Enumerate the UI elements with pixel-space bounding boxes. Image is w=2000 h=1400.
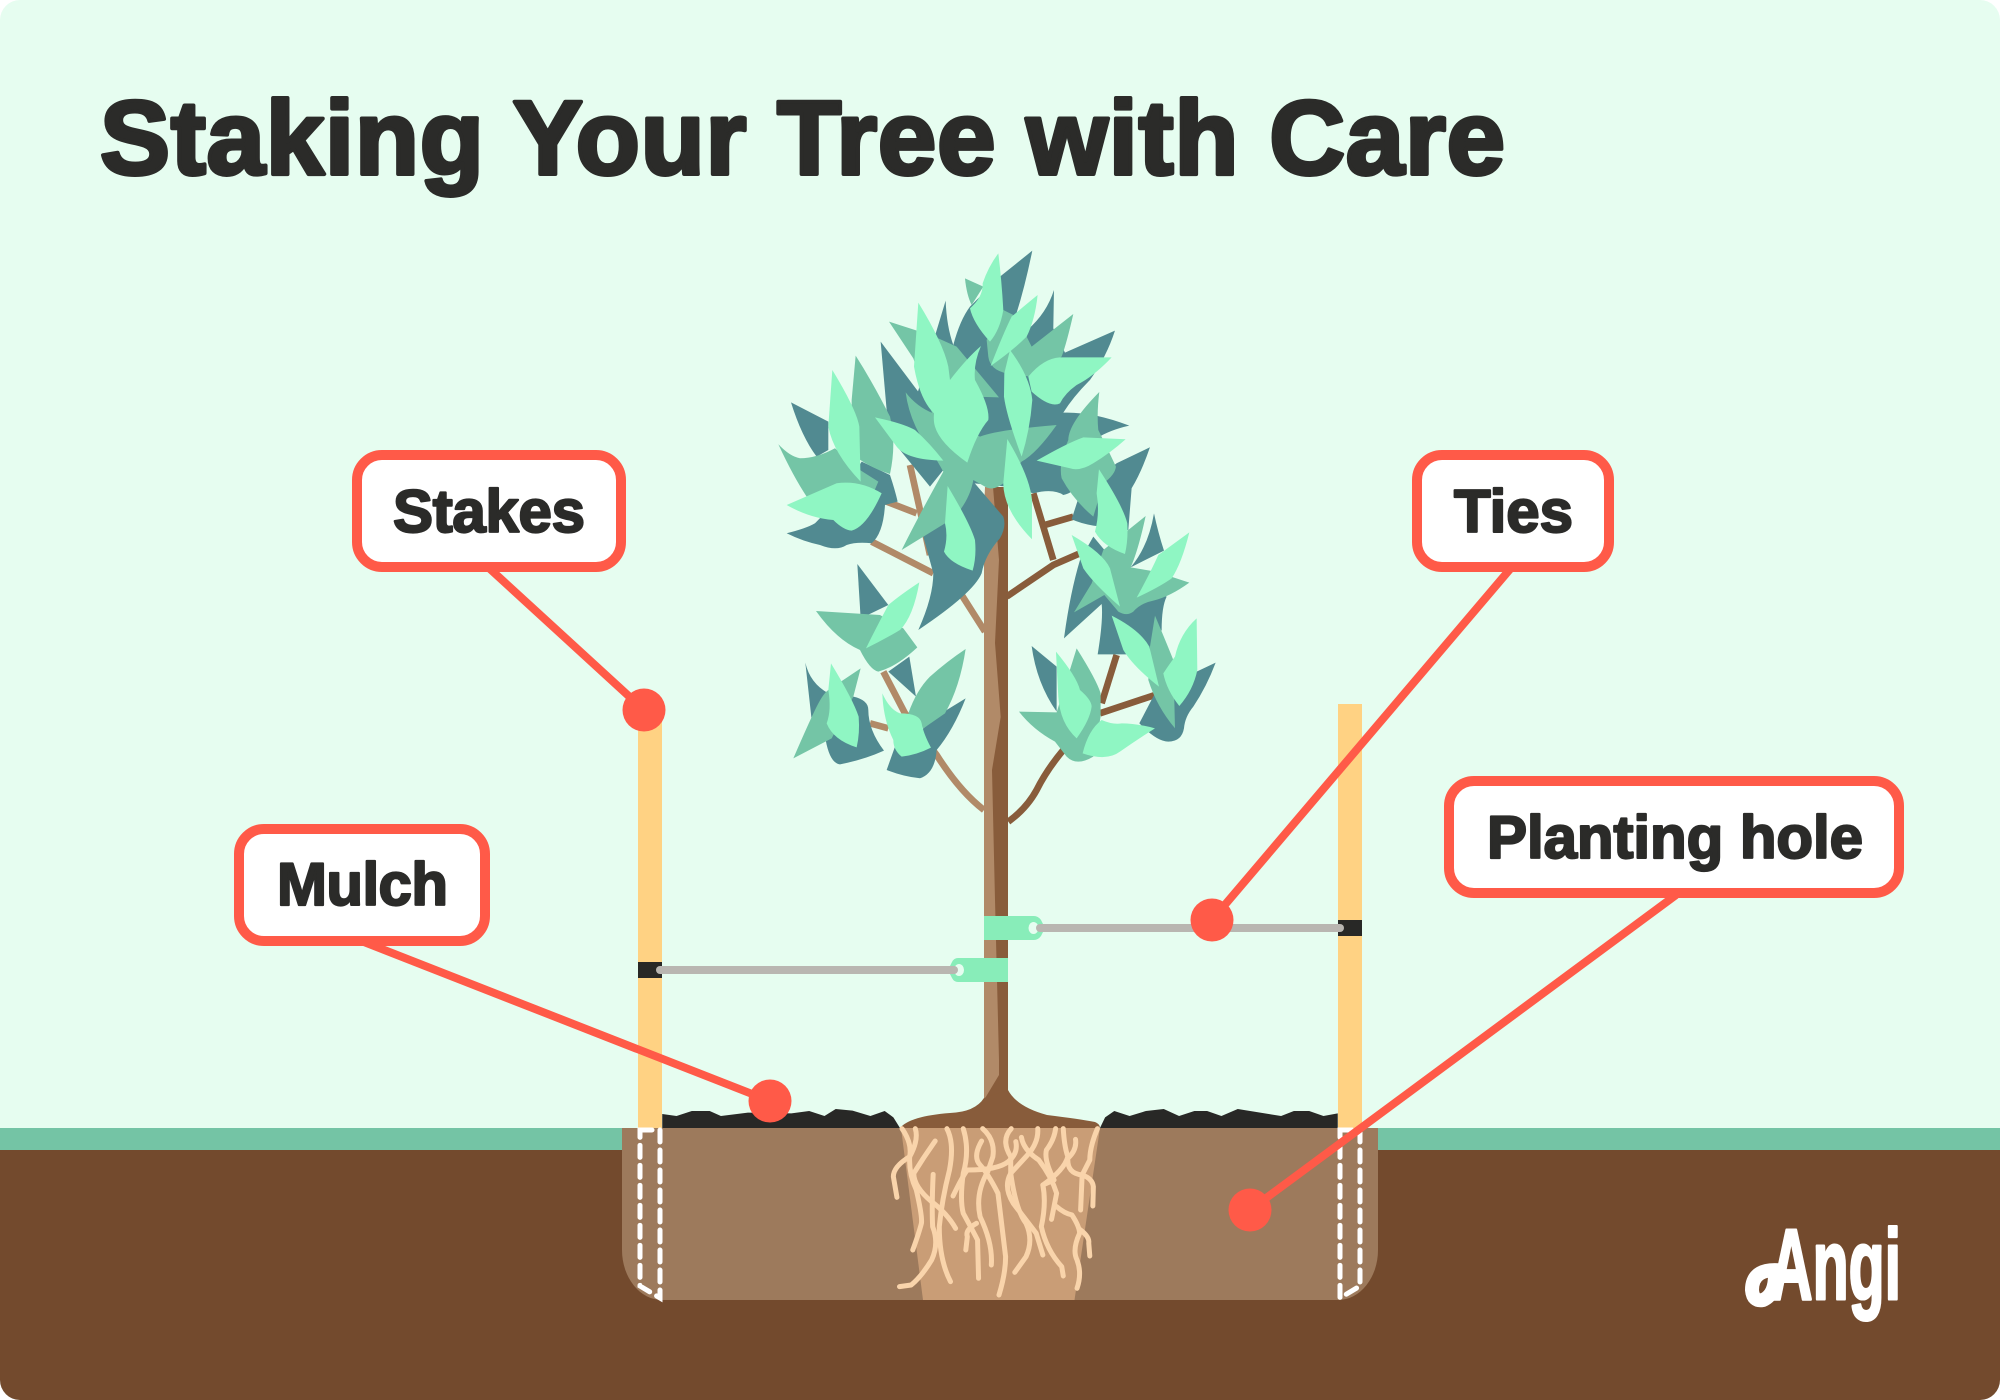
label: Stakes: [357, 455, 621, 567]
tree: [778, 251, 1216, 1128]
label: Mulch: Mulch: [277, 851, 448, 918]
branches lower: [870, 655, 1155, 822]
logo: Angi: Angi: [1770, 1209, 1901, 1321]
root ball: [901, 1128, 1100, 1300]
leader: planting hole: [1228, 895, 1676, 1232]
logo: Angi: [1752, 1209, 1901, 1321]
left tie: [660, 958, 1008, 982]
right stake: [1338, 704, 1362, 1298]
planting hole: [622, 1128, 1378, 1300]
mulch layer: [662, 1109, 1338, 1128]
trunk: [900, 487, 1100, 1128]
soil ground: [0, 1150, 2000, 1400]
right foliage cluster: [1064, 513, 1216, 742]
label: Planting hole: [1449, 781, 1899, 893]
lower foliage clusters: [793, 564, 1155, 778]
label: Planting hole: Planting hole: [1487, 804, 1863, 871]
left stake: [638, 704, 662, 1298]
label: Ties: Ties: [1454, 478, 1573, 545]
branches upper: [872, 465, 1080, 632]
label: Ties: [1417, 455, 1609, 567]
leader: mulch: [364, 942, 792, 1122]
right tie: [984, 916, 1340, 940]
label: Stakes: Stakes: [393, 478, 585, 545]
grass strip: [0, 1128, 2000, 1150]
tree roots: [893, 1129, 1097, 1295]
leader: ties: [1190, 568, 1511, 942]
label: Mulch: [239, 829, 485, 941]
title: Staking Your Tree with Care: [100, 80, 1505, 197]
main crown foliage: [778, 251, 1150, 630]
leader: stakes: [489, 568, 666, 732]
